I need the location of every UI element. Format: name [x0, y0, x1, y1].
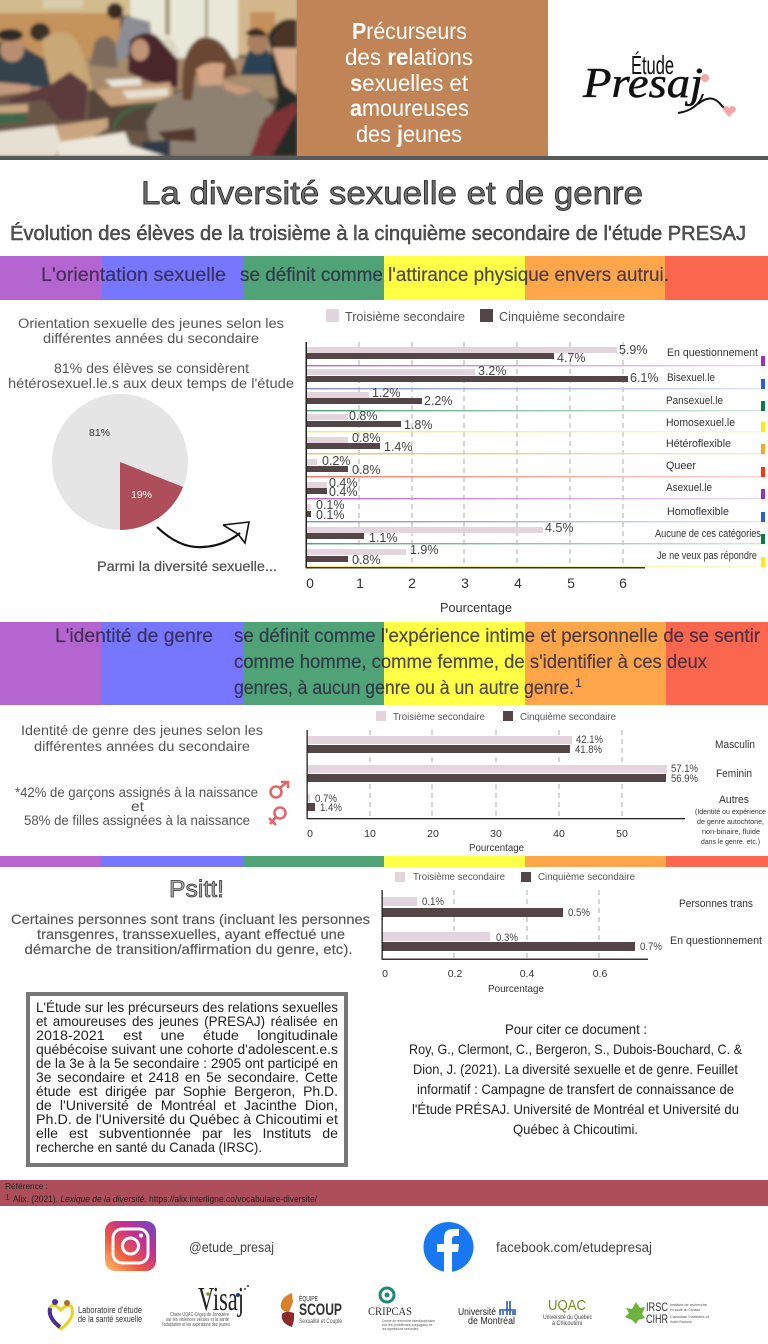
header title panel: sexuelles et [350, 70, 469, 96]
bar chart: trans persons: En questionnement [670, 935, 762, 947]
text: gender identity heading [21, 723, 263, 754]
bar chart: sexual orientation: Queer [666, 460, 696, 472]
logo: CRIPCAS: sur les problèmes conjugaux et [382, 1322, 433, 1327]
bar chart: sexual orientation: 0.4% [329, 476, 358, 490]
logo: Visaj: l'adaptation et les aspirations des jeunes [162, 1322, 230, 1328]
bar chart: sexual orientation: 0.8% [352, 463, 380, 477]
logo: CRIPCAS: Centre de recherche interdisciplinaire [382, 1318, 436, 1323]
panel: study description: de l'Université de Montréal et Jacinthe Dion, [36, 1097, 338, 1113]
bar chart: sexual orientation: 0.8% [352, 553, 380, 567]
icon: female symbol [269, 808, 286, 825]
text: trans persons note: Certaines personnes sont trans (incluant les personnes [11, 911, 370, 927]
bar chart: gender identity: de genre autochtone, [697, 817, 764, 826]
bar chart: sexual orientation: 0.2% [322, 454, 350, 468]
bar chart: trans persons: 0.6 [593, 968, 607, 980]
bar chart: trans persons: 0.3% [496, 932, 518, 944]
logo: Étude Presaj: Presaj [582, 61, 703, 107]
bar chart: trans persons: 0 [382, 968, 388, 980]
logo: CRIPCAS: les agressions sexuelles [382, 1326, 418, 1331]
bar chart: sexual orientation: Pansexuel.le [666, 395, 723, 407]
text: gender identity heading: Identité de genre des jeunes selon les [21, 723, 263, 738]
text: assigned at birth [15, 785, 258, 828]
rainbow band: gender identity definition: L'identité de genre [55, 626, 213, 647]
header separator [0, 156, 768, 160]
logo: Visaj: Chaire UQAC-Cégep de Jonquière [170, 1312, 229, 1318]
bar chart: trans persons: 0.2 [448, 968, 462, 980]
bar chart: sexual orientation: Homosexuel.le [666, 417, 735, 429]
panel: study description [28, 994, 346, 1165]
text: trans persons note: transgenres, transsexuelles, ayant effectué une [37, 926, 345, 942]
rainbow band: sexual orientation definition: se définit comme l'attirance physique envers autrui. [240, 265, 669, 286]
panel: study description: recherche en santé du Canada (IRSC). [36, 1139, 262, 1155]
text: how to cite [409, 1021, 743, 1137]
icon: Facebook [424, 1222, 474, 1272]
panel: study description: québécoise suivant une cohorte d'adolescent.e.s [36, 1041, 338, 1057]
logo: Équipe SCOUP: ÉQUIPE [299, 1294, 318, 1303]
logo: UQAC: UQAC [548, 1297, 586, 1314]
logo: IRSC CIHR: CIHR [646, 1312, 668, 1326]
bar chart: sexual orientation: 4.5% [545, 521, 574, 535]
logo: Équipe SCOUP [281, 1293, 343, 1327]
bar chart: sexual orientation: Pourcentage [440, 600, 512, 615]
rainbow band: sexual orientation definition [0, 256, 768, 300]
logo: Laboratoire d'étude de la santé sexuelle: Laboratoire d'étude [78, 1305, 142, 1315]
logo: Université de Montréal [458, 1301, 515, 1327]
logo: IRSC CIHR: IRSC [646, 1300, 668, 1314]
icon: Instagram [105, 1221, 156, 1271]
text: sexual orientation chart heading: hétérosexuel.le.s aux deux temps de l'étude [8, 376, 294, 391]
bar chart: sexual orientation: 0.1% [316, 508, 344, 522]
logo: Équipe SCOUP: Sexualité et Couple [299, 1319, 343, 1325]
bar chart: sexual orientation: 2.2% [424, 394, 452, 408]
rainbow band: gender identity definition: se définit comme l'expérience intime et personnelle de se sentir [234, 626, 761, 647]
rainbow divider [0, 856, 768, 867]
pie chart: 81% / 19% [52, 394, 188, 530]
bar chart: sexual orientation: 0.8% [349, 409, 378, 423]
bar chart: sexual orientation: 4 [514, 575, 522, 591]
logo: Équipe SCOUP: SCOUP [299, 1300, 342, 1319]
bar chart: sexual orientation: 1.9% [410, 543, 438, 557]
panel: study description: 2018-2021 est une étude longitudinale [36, 1027, 338, 1043]
logo: Étude Presaj [582, 50, 736, 117]
text: Instagram handle: @etude_presaj [189, 1240, 274, 1255]
reference band: Alix. (2021). Lexique de la diversité. https://alix.interligne.co/vocabulaire-diversite/ [13, 1194, 317, 1204]
bar chart: gender identity: 0 [307, 828, 313, 840]
text: trans persons note: démarche de transition/affirmation du genre, etc). [24, 941, 352, 957]
logo: Visaj: sur les violences vécues et la santé [166, 1317, 229, 1323]
bar chart: trans persons [382, 890, 762, 995]
panel: study description: de la 3e à la 5e secondaire : 2905 ont participé en [36, 1055, 338, 1071]
bar chart: trans persons: 0.5% [568, 907, 590, 919]
bar chart: sexual orientation: Hétéroflexible [666, 438, 731, 450]
header title panel [297, 0, 548, 156]
logo: CRIPCAS [368, 1288, 436, 1331]
bar chart: gender identity: 0.7% [315, 793, 337, 805]
bar chart: sexual orientation: 1.2% [372, 386, 400, 400]
header title panel: des jeunes [356, 121, 462, 147]
bar chart: sexual orientation: 1.8% [404, 418, 432, 432]
rainbow band: gender identity definition: 1 [575, 676, 582, 690]
text: how to cite: l'Étude PRÉSAJ. Université de Montréal et Université du [412, 1101, 739, 1117]
panel: study description: étude est dirigée par Sophie Bergeron, Ph.D. [36, 1083, 338, 1099]
bar chart: trans persons: 0.7% [640, 941, 662, 953]
text: trans persons note [11, 911, 370, 957]
bar chart: sexual orientation: 2 [408, 575, 416, 591]
legend: gender identity chart [376, 711, 616, 723]
logo: Université de Montréal: Université [458, 1307, 496, 1318]
bar chart: sexual orientation: 3.2% [478, 364, 506, 378]
bar chart: gender identity: 50 [616, 828, 628, 840]
arrow: from pie slice to diversity chart [157, 522, 249, 547]
caption: among sexual diversity: Parmi la diversité sexuelle... [97, 559, 277, 574]
bar chart: sexual orientation: Bisexuel.le [667, 372, 715, 384]
text: sexual orientation chart heading: Orientation sexuelle des jeunes selon les [18, 316, 284, 331]
icon: male symbol [270, 782, 288, 798]
text: how to cite: informatif : Campagne de transfert de connaissance de [417, 1081, 734, 1097]
text: how to cite: Québec à Chicoutimi. [513, 1121, 638, 1137]
text: assigned at birth: 58% de filles assignées à la naissance [24, 813, 250, 828]
text: how to cite: Pour citer ce document : [505, 1021, 647, 1037]
bar chart: gender identity: non-binaire, fluide [702, 827, 760, 836]
text: Facebook page: facebook.com/etudepresaj [496, 1240, 652, 1255]
logo: IRSC CIHR: Canadian Institutes of [670, 1314, 710, 1319]
bar chart: sexual orientation: 1.1% [369, 531, 398, 545]
legend: trans chart: Cinquième secondaire [538, 871, 635, 883]
logo: Laboratoire d'étude de la santé sexuelle [49, 1299, 142, 1329]
logo: Université de Montréal: de Montréal [468, 1316, 515, 1327]
text: how to cite: Dion, J. (2021). La diversité sexuelle et de genre. Feuillet [413, 1061, 738, 1077]
bar chart: sexual orientation: 1 [356, 575, 364, 591]
pie chart: 81% / 19%: 81% [89, 427, 110, 439]
text: assigned at birth: *42% de garçons assignés à la naissance [15, 785, 258, 800]
bar chart: gender identity: 30 [490, 828, 502, 840]
bar chart: trans persons: 0.1% [422, 896, 444, 908]
panel: study description: elle est subventionnée par les Instituts de [36, 1125, 338, 1141]
panel: study description: Ph.D. de l'Université du Québec à Chicoutimi et [36, 1111, 338, 1127]
rainbow band: gender identity definition [0, 622, 768, 705]
text: sexual orientation chart heading: différentes années du secondaire [43, 331, 259, 346]
logo: IRSC CIHR [625, 1300, 710, 1326]
logo: UQAC [543, 1297, 593, 1327]
bar chart: gender identity: 1.4% [320, 802, 342, 814]
bar chart: gender identity: 57.1% [671, 763, 698, 775]
bar chart: gender identity: 42.1% [576, 734, 603, 746]
bar chart: gender identity: dans le genre. etc.) [701, 837, 760, 846]
bar chart: gender identity: Autres [719, 794, 749, 806]
legend: trans chart [395, 871, 635, 883]
bar chart: gender identity: 20 [427, 828, 439, 840]
bar chart: gender identity: 40 [553, 828, 565, 840]
subtitle: Évolution des élèves de la troisième à la cinquième secondaire de l'étude PRESAJ [10, 222, 746, 245]
bar chart: sexual orientation: 6.1% [630, 371, 658, 385]
bar chart: sexual orientation: 5.9% [619, 343, 648, 357]
legend: gender identity chart: Cinquième secondaire [520, 711, 616, 723]
logo: IRSC CIHR: Instituts de recherche [670, 1302, 708, 1307]
bar chart: gender identity [306, 730, 766, 854]
bar chart: gender identity: Masculin [715, 739, 755, 751]
panel: study description: et amoureuses des jeunes (PRESAJ) réalisée en [36, 1013, 338, 1029]
bar chart: sexual orientation: 3 [461, 575, 469, 591]
logo: Étude Presaj: Étude [631, 50, 674, 80]
logo: Visaj: Visaj [198, 1281, 244, 1318]
bar chart: sexual orientation: 5 [567, 575, 575, 591]
reference band: Référence : [5, 1181, 48, 1191]
logo: UQAC: à Chicoutimi [552, 1320, 582, 1327]
header title panel: des relations [345, 44, 473, 70]
legend: trans chart: Troisième secondaire [413, 871, 505, 883]
bar chart: sexual orientation [306, 342, 765, 615]
logo: IRSC CIHR: Health Research [670, 1319, 692, 1324]
bar chart: sexual orientation: 4.7% [557, 351, 586, 365]
bar chart: sexual orientation: Asexuel.le [666, 482, 712, 494]
text: sexual orientation chart heading: 81% des élèves se considèrent [54, 361, 249, 376]
bar chart: trans persons: Personnes trans [679, 898, 753, 910]
bar chart: trans persons: 0.4 [520, 968, 534, 980]
bar chart: sexual orientation: 0 [306, 575, 314, 591]
bar chart: sexual orientation: 6 [619, 575, 627, 591]
bar chart: gender identity: 41.8% [575, 744, 602, 756]
bar chart: gender identity: 10 [364, 828, 376, 840]
bar chart: sexual orientation: 0.1% [316, 498, 344, 512]
bar chart: sexual orientation: 0.8% [352, 431, 380, 445]
bar chart: gender identity: 56.9% [671, 773, 698, 785]
panel: study description: L'Étude sur les précurseurs des relations sexuelles [36, 999, 338, 1015]
logo: UQAC: Université du Québec [543, 1314, 593, 1321]
logo: Laboratoire d'étude de la santé sexuelle: de la santé sexuelle [78, 1314, 142, 1324]
bar chart: trans persons: Pourcentage [488, 983, 544, 995]
pie chart: 81% / 19%: 19% [131, 489, 152, 501]
legend: sexual orientation chart: Troisième secondaire [345, 309, 465, 324]
header photo: students in a classroom [0, 0, 305, 165]
legend: sexual orientation chart [326, 309, 625, 324]
text: sexual orientation chart heading [8, 316, 294, 391]
logo: Visaj [162, 1281, 249, 1328]
reference band [0, 1180, 768, 1206]
bar chart: sexual orientation: 0.4% [329, 485, 358, 499]
rainbow band: sexual orientation definition: L'orientation sexuelle [41, 265, 226, 286]
legend: sexual orientation chart: Cinquième secondaire [499, 309, 625, 324]
header title panel: Précurseurs [352, 18, 467, 44]
panel: study description: 3e secondaire et 2418 en 5e secondaire. Cette [36, 1069, 338, 1085]
text: assigned at birth: et [131, 799, 144, 814]
bar chart: gender identity: Feminin [716, 768, 752, 780]
heading: Psitt!: Psitt! [169, 876, 224, 903]
legend: gender identity chart: Troisième secondaire [393, 711, 485, 723]
logo: IRSC CIHR: en santé du Canada [670, 1307, 701, 1312]
header title panel: amoureuses [350, 95, 469, 121]
bar chart: sexual orientation: En questionnement [667, 347, 758, 359]
title: La diversité sexuelle et de genre [141, 175, 643, 211]
bar chart: sexual orientation: Homoflexible [667, 506, 729, 518]
bar chart: gender identity: Pourcentage [469, 842, 524, 854]
logo: CRIPCAS: CRIPCAS [368, 1304, 412, 1318]
text: gender identity heading: différentes années du secondaire [34, 739, 250, 754]
reference band: 1 [5, 1192, 10, 1202]
bar chart: sexual orientation: 1.4% [384, 440, 412, 454]
rainbow band: gender identity definition: comme homme, comme femme, de s'identifier à ces deux [234, 652, 707, 673]
rainbow band: gender identity definition: genres, à aucun genre ou à un autre genre. [234, 678, 574, 699]
